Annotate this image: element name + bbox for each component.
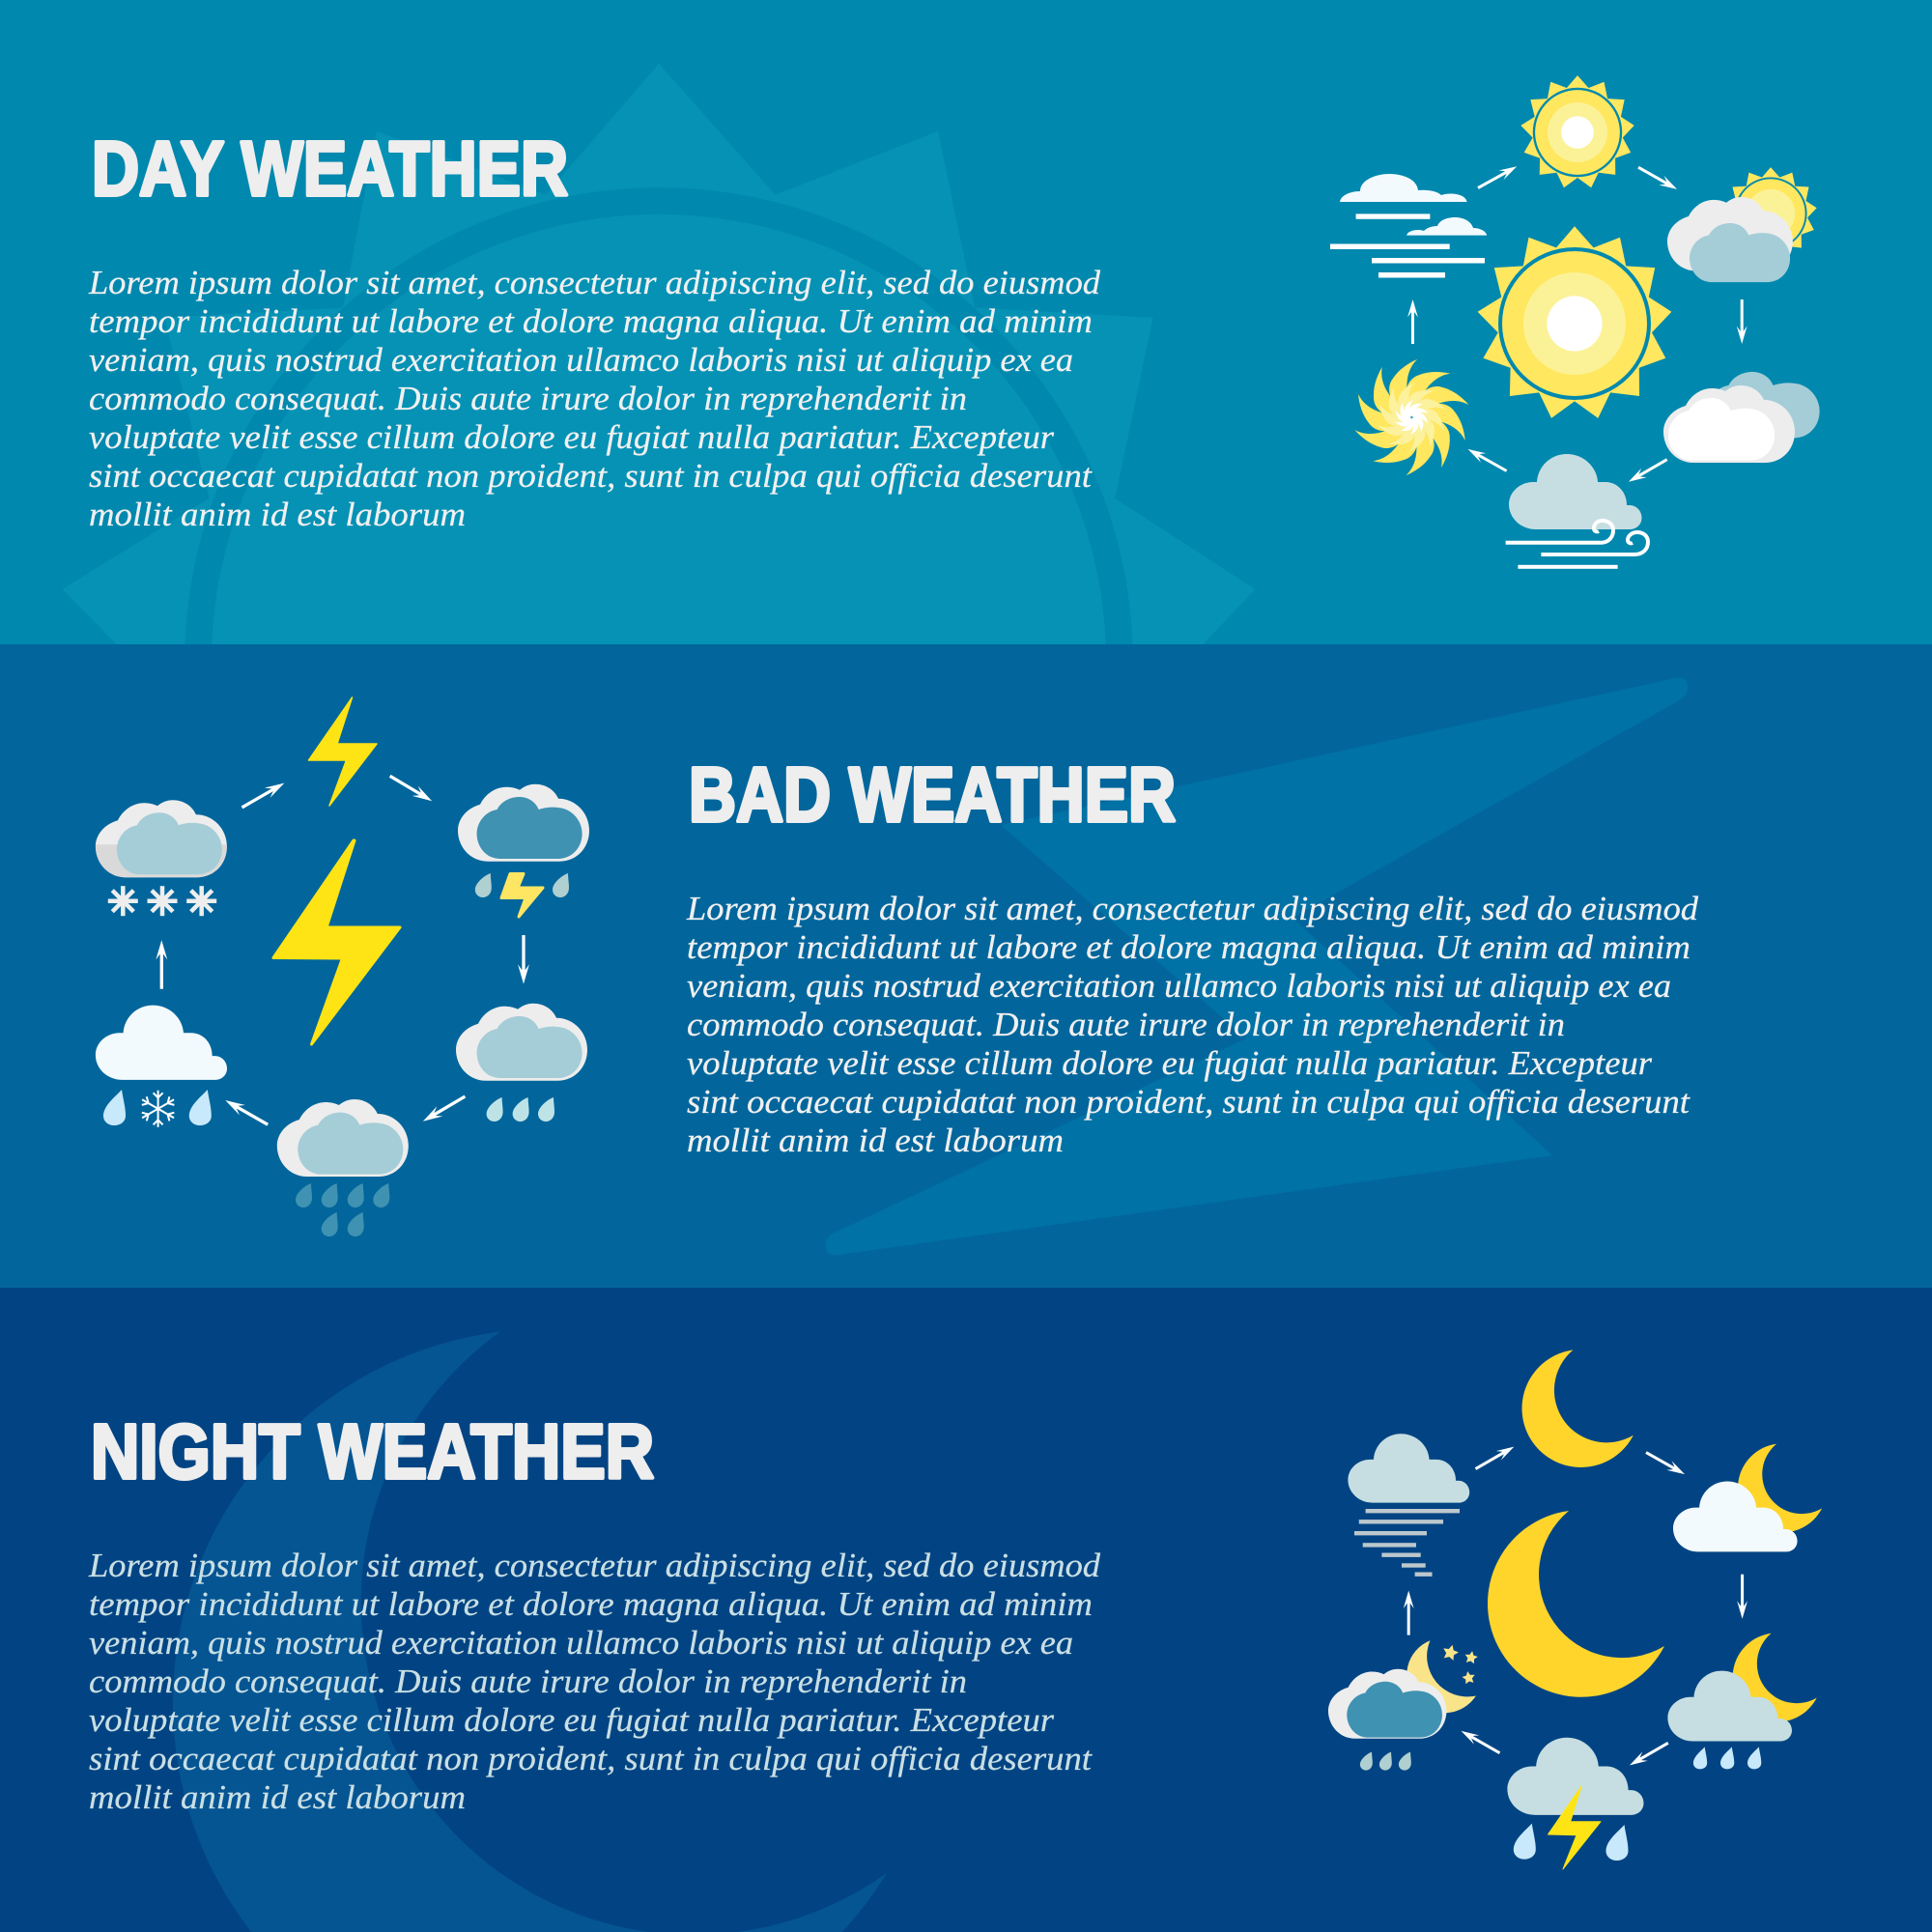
icon: layered clouds — [1663, 372, 1820, 463]
icon: snow cloud — [96, 800, 227, 916]
heading: bad weather: BAD WEATHER — [689, 752, 1176, 838]
text block: day weather: mollit anim id est laborum — [89, 496, 466, 533]
text block: bad weather: voluptate velit esse cillum dolore eu fugiat nulla pariatur. Excepteur — [687, 1044, 1652, 1082]
icon: windy cloud — [1506, 454, 1648, 569]
text block: day weather: Lorem ipsum dolor sit amet, consectetur adipiscing elit, sed do eiusmod — [88, 264, 1101, 301]
icon: cloud with moon, stars and rain — [1328, 1640, 1479, 1771]
icon: partly cloudy sun — [1667, 167, 1817, 282]
arrows: night cycle — [1404, 1442, 1747, 1770]
panel: night weather — [0, 1288, 1932, 1932]
icon: storm cloud — [458, 784, 589, 917]
text block: day weather: commodo consequat. Duis aute irure dolor in reprehenderit in — [89, 380, 967, 417]
panel: day weather — [0, 0, 1932, 644]
background crescent moon — [173, 1331, 887, 1932]
text block: day weather: sint occaecat cupidatat non proident, sunt in culpa qui officia deserunt — [89, 457, 1093, 495]
icon: crescent moon — [1522, 1350, 1634, 1467]
icon: heavy rain cloud — [277, 1099, 409, 1236]
icon: moon behind white cloud — [1673, 1444, 1822, 1551]
icon: large sun — [1478, 226, 1671, 418]
icon: large lightning bolt — [273, 840, 400, 1044]
icon: thunderstorm cloud — [1507, 1738, 1643, 1869]
heading: day weather: DAY WEATHER — [92, 126, 568, 212]
icon: lightning bolt — [309, 697, 377, 806]
icon: large crescent moon — [1488, 1511, 1664, 1697]
background sun — [63, 64, 1255, 644]
text block: bad weather: sint occaecat cupidatat non proident, sunt in culpa qui officia deserunt — [687, 1083, 1690, 1121]
text block: bad weather: mollit anim id est laborum — [687, 1122, 1064, 1159]
text block: bad weather: commodo consequat. Duis aute irure dolor in reprehenderit in — [687, 1006, 1565, 1043]
icon: tornado cloud — [1348, 1434, 1469, 1577]
text block: night weather: mollit anim id est laborum — [89, 1778, 466, 1816]
background lightning bolt — [826, 678, 1688, 1255]
text block: night weather: Lorem ipsum dolor sit amet, consectetur adipiscing elit, sed do eiusmod — [88, 1547, 1101, 1584]
heading: night weather: NIGHT WEATHER — [91, 1408, 654, 1494]
icon: haze clouds — [1330, 174, 1487, 278]
text block: day weather — [88, 264, 1101, 533]
text block: bad weather: Lorem ipsum dolor sit amet, consectetur adipiscing elit, sed do eiusmod — [686, 890, 1699, 927]
icon: sun — [1520, 75, 1634, 187]
text block: bad weather: veniam, quis nostrud exercitation ullamco laboris nisi ut aliquip ex ea — [687, 967, 1671, 1005]
icon: rain cloud — [456, 1004, 587, 1122]
icon: moon behind rain cloud — [1667, 1634, 1817, 1769]
arrows: bad weather cycle — [156, 771, 529, 1129]
text block: night weather: veniam, quis nostrud exercitation ullamco laboris nisi ut aliquip ex ea — [89, 1624, 1073, 1662]
panel: bad weather — [0, 644, 1932, 1288]
text block: night weather — [88, 1547, 1101, 1816]
icon: sleet cloud — [96, 1006, 227, 1127]
text block: bad weather — [686, 890, 1699, 1159]
arrows: day cycle — [1407, 162, 1747, 486]
icon: swirling sun — [1348, 354, 1476, 481]
text block: bad weather: tempor incididunt ut labore et dolore magna aliqua. Ut enim ad minim — [687, 928, 1690, 966]
text block: day weather: voluptate velit esse cillum dolore eu fugiat nulla pariatur. Excepteur — [89, 418, 1054, 456]
text block: day weather: veniam, quis nostrud exercitation ullamco laboris nisi ut aliquip ex ea — [89, 341, 1073, 379]
text block: night weather: tempor incididunt ut labore et dolore magna aliqua. Ut enim ad minim — [89, 1585, 1093, 1623]
text block: night weather: voluptate velit esse cillum dolore eu fugiat nulla pariatur. Excepteur — [89, 1701, 1054, 1739]
text block: day weather: tempor incididunt ut labore et dolore magna aliqua. Ut enim ad minim — [89, 302, 1093, 340]
text block: night weather: sint occaecat cupidatat non proident, sunt in culpa qui officia deserunt — [89, 1740, 1093, 1777]
text block: night weather: commodo consequat. Duis aute irure dolor in reprehenderit in — [89, 1662, 967, 1700]
